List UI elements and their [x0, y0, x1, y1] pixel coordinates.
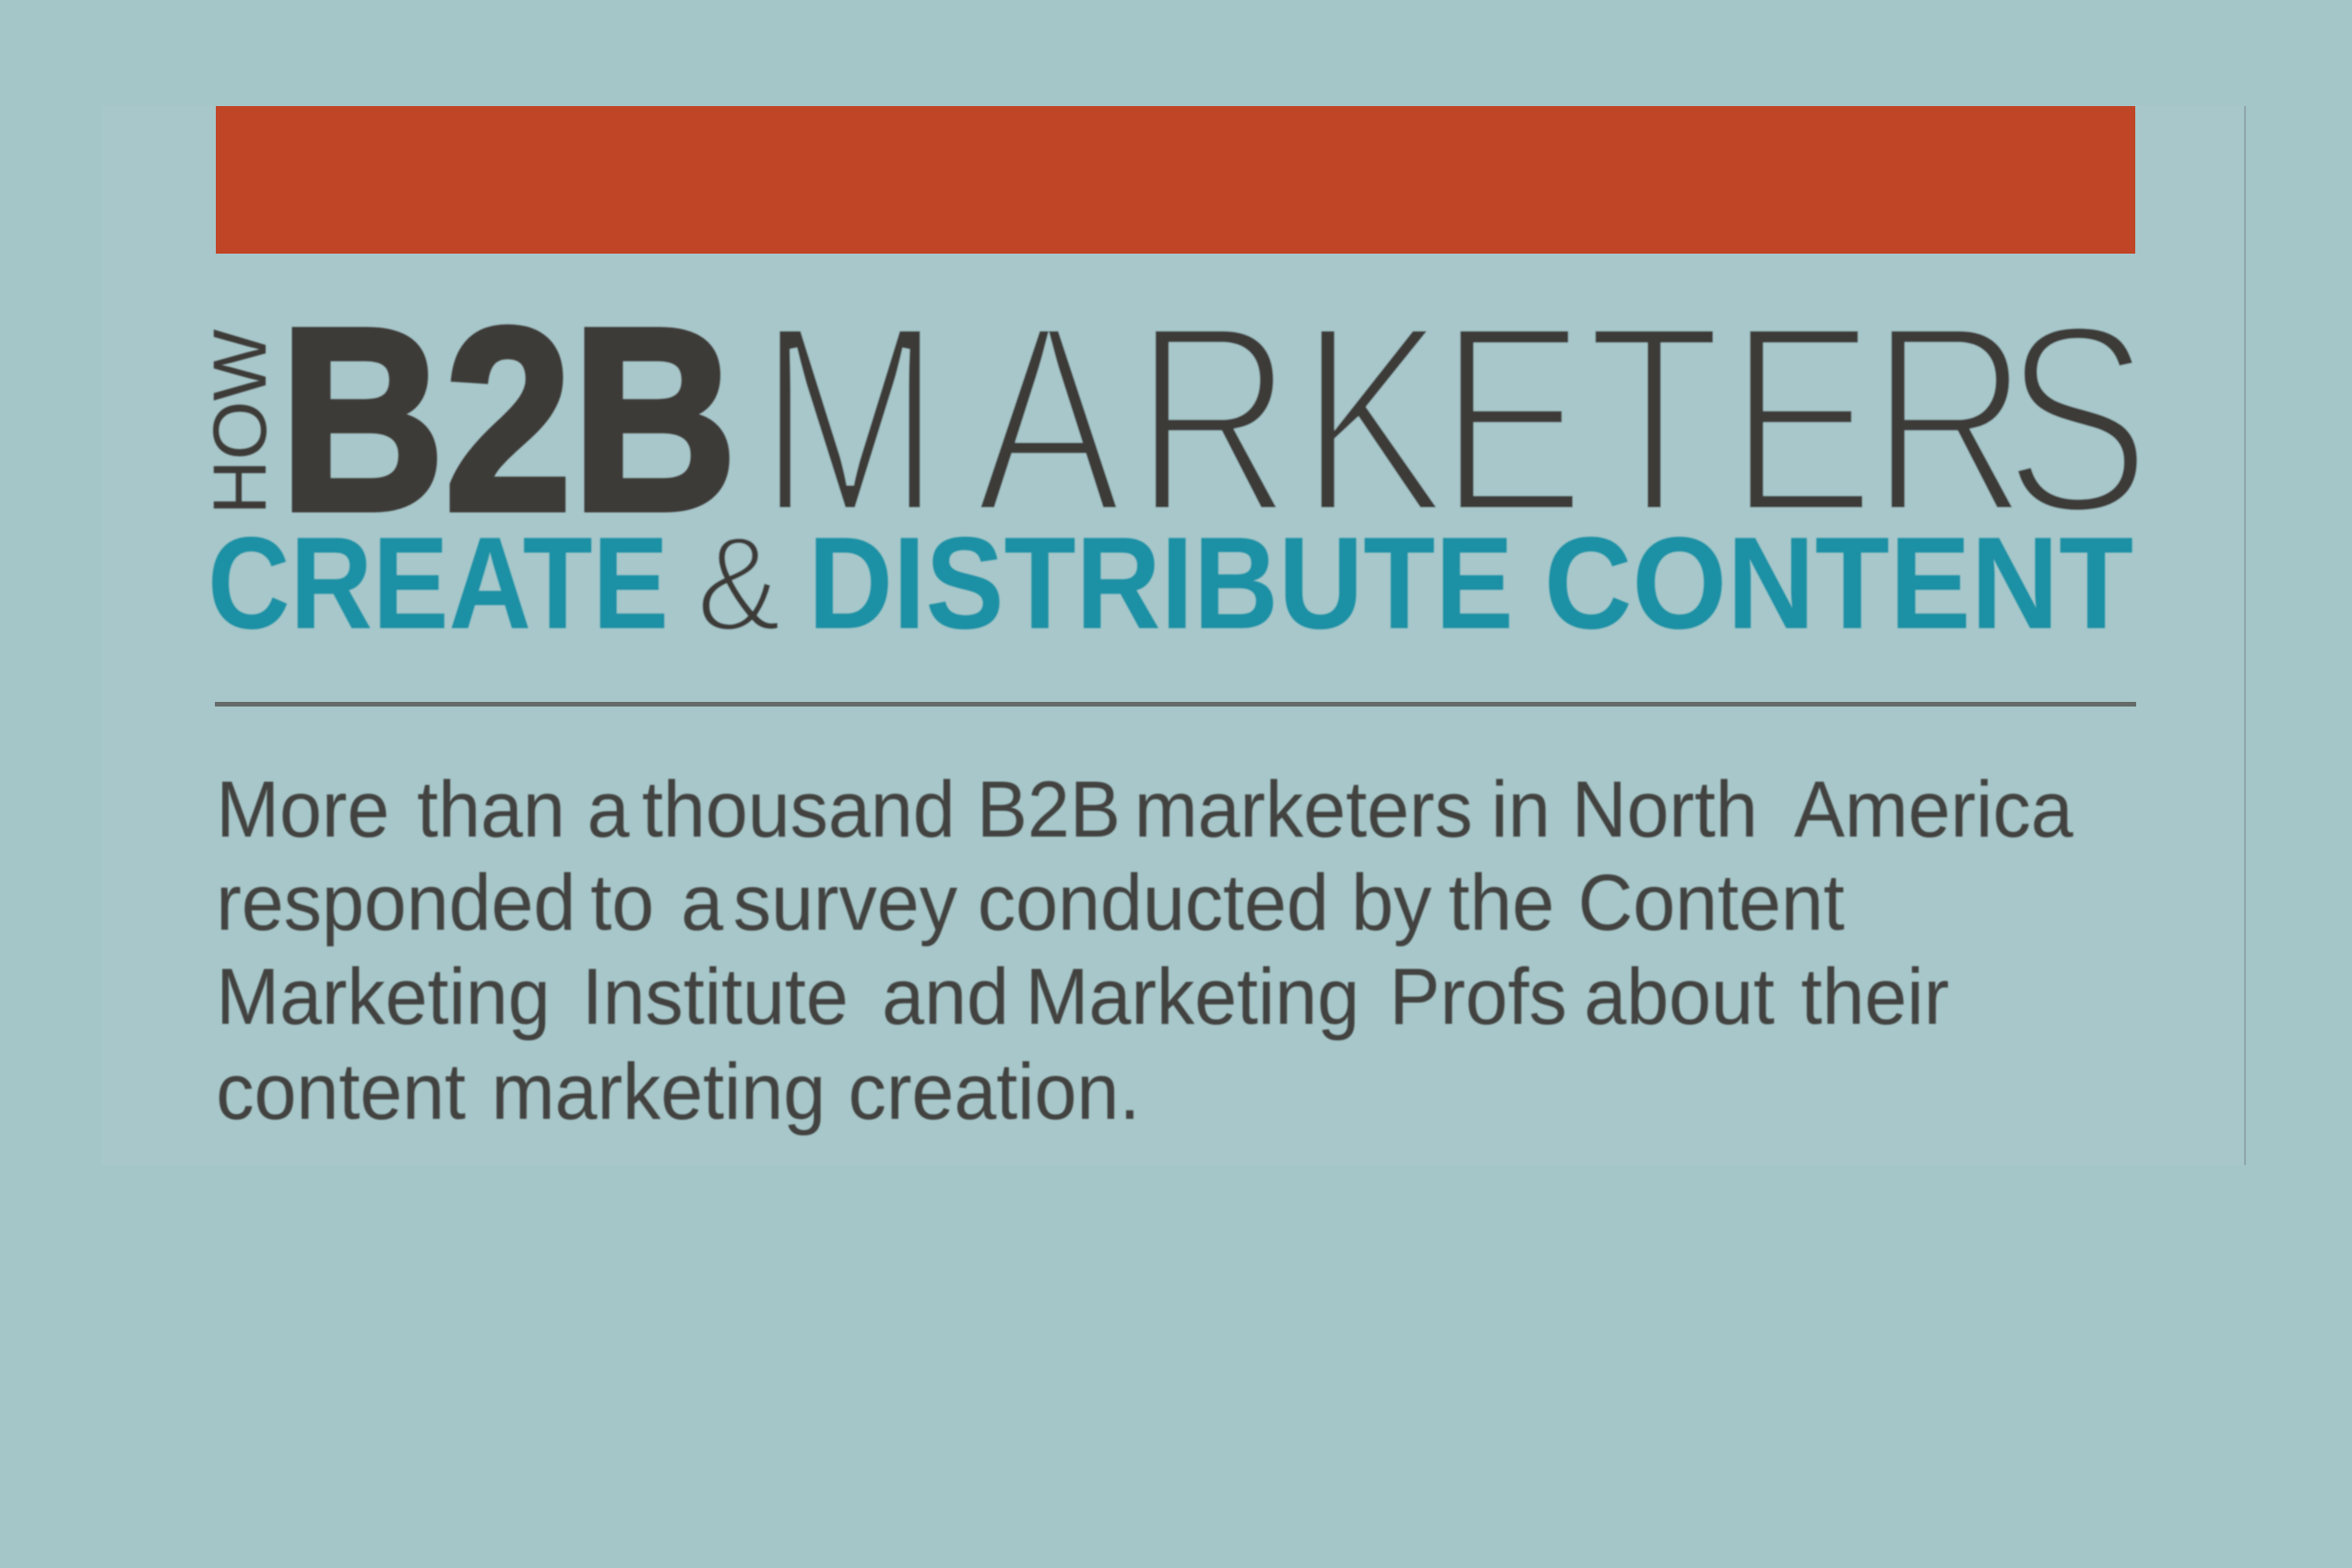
intro paragraph: in: [1491, 765, 1572, 853]
intro paragraph: a: [587, 765, 650, 853]
intro paragraph: Profs: [1389, 952, 1588, 1040]
banner: orange bar: [216, 106, 2135, 254]
intro paragraph: B2B: [977, 765, 1142, 853]
intro paragraph: creation.: [849, 1047, 1140, 1135]
intro paragraph: to: [590, 858, 675, 946]
intro paragraph: America: [1794, 765, 2073, 853]
intro paragraph: and: [882, 952, 1030, 1040]
intro paragraph: than: [417, 765, 587, 853]
intro paragraph: Content: [1578, 858, 1845, 946]
title word: MARKETERS: MARKETERS: [758, 267, 2151, 569]
title: [198, 267, 2151, 659]
intro paragraph: their: [1801, 952, 1949, 1040]
intro paragraph: thousand: [642, 765, 977, 853]
title word: B2B: B2B: [279, 274, 737, 564]
intro paragraph: More: [216, 765, 410, 853]
subtitle: create and distribute content: CREATE: [208, 510, 669, 657]
intro paragraph: survey: [733, 858, 979, 946]
intro paragraph: a: [681, 858, 744, 946]
intro paragraph: marketing: [492, 1047, 847, 1135]
subtitle: create and distribute content: CONTENT: [1544, 510, 2133, 657]
panel: header area: [101, 106, 2246, 1165]
intro paragraph: Marketing: [216, 952, 572, 1040]
intro paragraph: about: [1584, 952, 1796, 1040]
intro paragraph: North: [1572, 765, 1779, 853]
divider rule: [215, 702, 2136, 707]
intro paragraph: content: [216, 1047, 487, 1135]
intro paragraph: responded: [216, 858, 597, 946]
intro paragraph: Institute: [582, 952, 870, 1040]
intro paragraph: conducted: [978, 858, 1350, 946]
intro paragraph: the: [1449, 858, 1575, 946]
intro paragraph: marketers: [1134, 765, 1494, 853]
title word: HOW: HOW: [198, 328, 282, 515]
subtitle: create and distribute content: [208, 508, 2133, 659]
intro paragraph: [216, 765, 2073, 1135]
subtitle: create and distribute content: &: [696, 508, 781, 659]
subtitle: create and distribute content: DISTRIBUTE: [808, 510, 1514, 657]
intro paragraph: by: [1351, 858, 1453, 946]
intro paragraph: Marketing: [1026, 952, 1381, 1040]
